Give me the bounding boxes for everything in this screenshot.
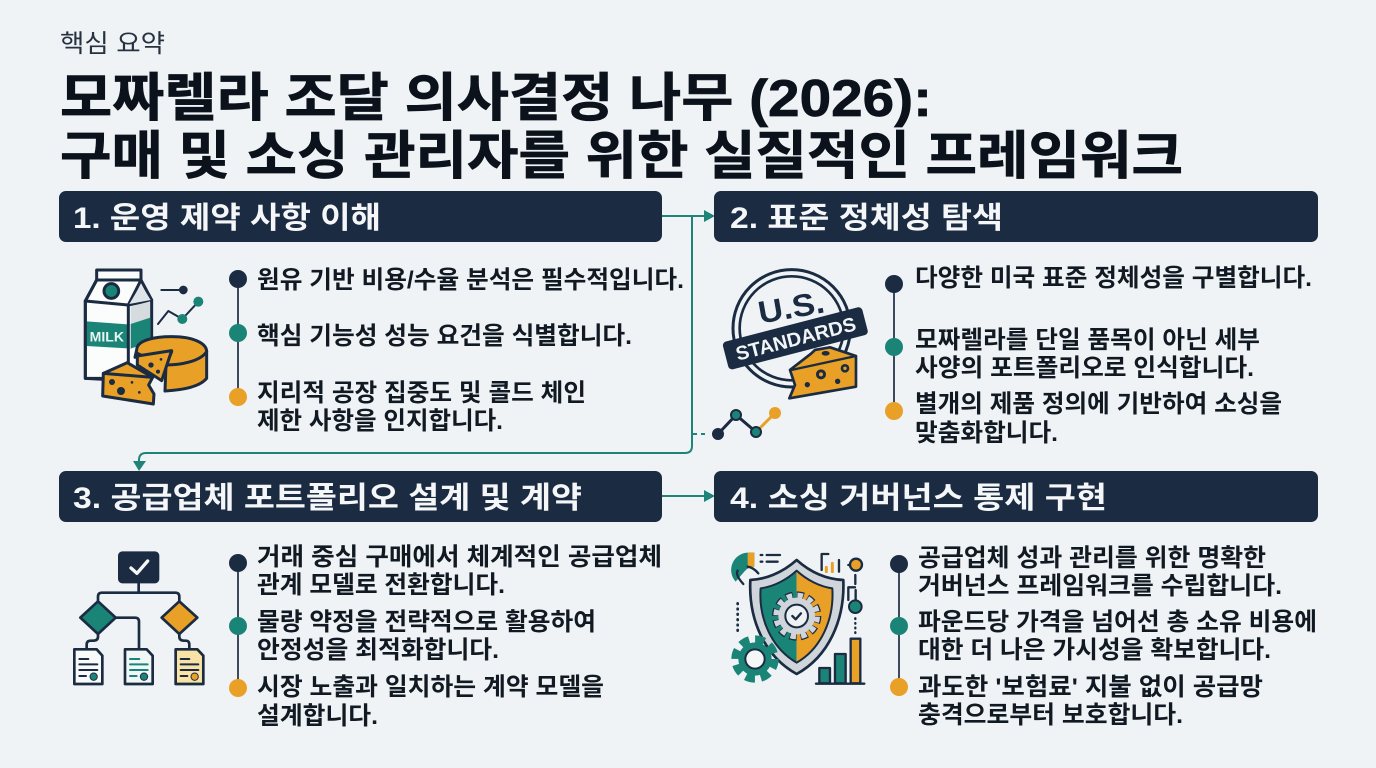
heading: step 3 [59, 471, 662, 522]
arrow: step 1 to step 2 and step 3 [133, 210, 715, 471]
text block: step 3 bullets: 설계합니다. [257, 702, 378, 730]
text block: step 1 bullets: 제한 사항을 인지합니다. [257, 407, 503, 435]
text block: step 4 bullets: 파운드당 가격을 넘어선 총 소유 비용에 [918, 608, 1317, 636]
heading: step 1: 1. 운영 제약 사항 이해 [73, 202, 381, 235]
arrow: step 3 to step 4 [662, 490, 715, 502]
text block: step 1 bullets [257, 266, 684, 435]
text block: step 3 bullets: 거래 중심 구매에서 체계적인 공급업체 [257, 543, 662, 571]
text block: step 1 bullets: 원유 기반 비용/수율 분석은 필수적입니다. [257, 266, 684, 294]
text block: step 1 bullets: 핵심 기능성 성능 요건을 식별합니다. [257, 322, 632, 350]
timeline: step 3 bullets [229, 554, 247, 697]
heading: step 3: 3. 공급업체 포트폴리오 설계 및 계약 [73, 482, 582, 515]
panel: step 1 operating constraints [59, 191, 684, 435]
text block: step 2 bullets: 모짜렐라를 단일 품목이 아닌 세부 [915, 326, 1260, 354]
text block: step 1 bullets: 지리적 공장 집중도 및 콜드 체인 [257, 379, 586, 407]
heading: step 1 [59, 191, 662, 242]
heading: step 2: 2. 표준 정체성 탐색 [730, 202, 1003, 235]
text block: step 3 bullets: 안정성을 최적화합니다. [257, 636, 499, 664]
text block: step 4 bullets [918, 544, 1317, 729]
title [60, 70, 1183, 186]
text block: step 2 bullets: 맞춤화합니다. [915, 419, 1058, 447]
text block: step 3 bullets: 관계 모델로 전환합니다. [257, 571, 505, 599]
icon: decision tree with contracts [74, 553, 203, 684]
text block: step 2 bullets: 다양한 미국 표준 정체성을 구별합니다. [915, 264, 1312, 292]
icon: small network line [693, 407, 781, 440]
heading: step 4 [714, 471, 1318, 522]
panel: step 4 sourcing governance [714, 471, 1318, 729]
icon: U.S. standards badge with cheese [722, 270, 869, 398]
panel: step 3 supplier portfolio [59, 471, 662, 730]
icon: governance shield with gears and charts [731, 553, 864, 684]
icon: U.S. standards badge with cheese: STANDARDS [734, 313, 858, 366]
text block: step 3 bullets: 물량 약정을 전략적으로 활용하여 [257, 608, 596, 636]
icon: milk carton and cheese [85, 270, 207, 404]
text block: step 2 bullets: 별개의 제품 정의에 기반하여 소싱을 [915, 390, 1282, 418]
text block: step 4 bullets: 충격으로부터 보호합니다. [918, 701, 1183, 729]
text block: step 2 bullets: 사양의 포트폴리오로 인식합니다. [915, 354, 1254, 382]
text block: step 3 bullets: 시장 노출과 일치하는 계약 모델을 [257, 673, 604, 701]
text block: step 2 bullets [915, 264, 1312, 447]
timeline: step 4 bullets [890, 555, 908, 696]
timeline: step 1 bullets [229, 270, 247, 406]
text block: step 4 bullets: 대한 더 나은 가시성을 확보합니다. [918, 636, 1271, 664]
title: 모짜렐라 조달 의사결정 나무 (2026): [60, 70, 932, 128]
panel: step 2 standard identity [693, 191, 1318, 447]
heading: step 2 [714, 191, 1318, 242]
timeline: step 2 bullets [885, 275, 903, 420]
title: 구매 및 소싱 관리자를 위한 실질적인 프레임워크 [60, 128, 1183, 186]
text block: step 4 bullets: 공급업체 성과 관리를 위한 명확한 [918, 544, 1266, 572]
icon: U.S. standards badge with cheese: U.S. [755, 285, 827, 331]
text block: step 4 bullets: 과도한 '보험료' 지불 없이 공급망 [918, 673, 1263, 701]
text block: step 4 bullets: 거버넌스 프레임워크를 수립합니다. [918, 572, 1282, 600]
heading: step 4: 4. 소싱 거버넌스 통제 구현 [730, 482, 1107, 515]
kicker: executive summary: 핵심 요약 [60, 24, 165, 60]
text block: step 3 bullets [257, 543, 662, 730]
label: MILK: MILK [90, 329, 124, 344]
